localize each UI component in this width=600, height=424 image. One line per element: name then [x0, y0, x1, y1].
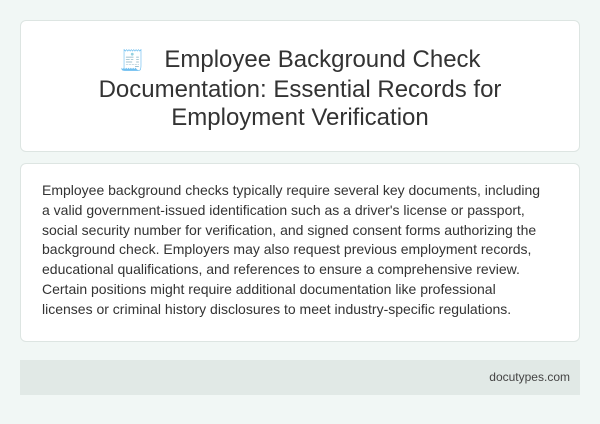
text block: background check. Employers may also request previous employment records, — [42, 241, 531, 257]
panel: title — [20, 20, 580, 152]
footer — [20, 360, 580, 395]
title: 🧾 Employee Background Check — [119, 46, 481, 73]
text block: licenses or criminal history disclosures to meet industry-specific regulations. — [42, 301, 511, 317]
text block: social security number for verification, and signed consent forms authorizing the — [42, 222, 536, 238]
text block: a valid government-issued identification such as a driver's license or passport, — [42, 202, 525, 218]
title: Employment Verification — [171, 104, 429, 131]
text block — [42, 182, 540, 317]
text block: educational qualifications, and references to ensure a comprehensive review. — [42, 261, 520, 277]
title — [99, 46, 501, 131]
panel: description — [20, 163, 580, 342]
title: Documentation: Essential Records for — [99, 76, 501, 102]
text block: Certain positions might require additional documentation like professional — [42, 281, 496, 297]
text block: Employee background checks typically require several key documents, including — [42, 182, 540, 198]
footer text: docutypes.com — [489, 370, 570, 384]
